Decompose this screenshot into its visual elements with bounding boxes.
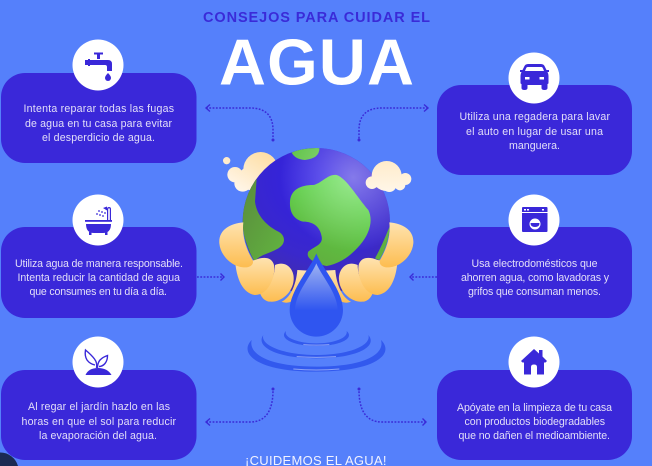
panel: uso responsable (1, 194, 196, 318)
icon: bathtub (85, 206, 112, 235)
panel: electrodomesticos: ahorren agua, como lavadoras y (461, 272, 610, 284)
panel: uso responsable: que consumes en tu día a día. (30, 286, 167, 298)
title: consejos: CONSEJOS PARA CUIDAR EL (203, 10, 430, 26)
panel: electrodomesticos: grifos que consuman menos. (468, 286, 601, 298)
icon: washing machine (522, 207, 548, 232)
panel: lavar el auto (437, 52, 632, 175)
hands (219, 222, 413, 303)
panel: regar el jardin: Al regar el jardín hazlo en las (28, 401, 170, 413)
cloud: right (366, 161, 411, 192)
arrow: bottom right (358, 388, 426, 426)
panel: reparar fugas (1, 40, 196, 163)
panel: lavar el auto: manguera. (509, 140, 560, 152)
ripples (248, 331, 385, 372)
icon: house (521, 349, 547, 374)
panel: electrodomesticos: Usa electrodomésticos que (472, 258, 598, 270)
water drop (290, 253, 343, 337)
panel: regar el jardin: la evaporación del agua. (39, 430, 157, 442)
arrow: bottom left (206, 388, 274, 426)
arrow: middle left (197, 274, 224, 280)
panel: reparar fugas: el desperdicio de agua. (42, 132, 155, 144)
title: agua: AGUA (219, 26, 414, 98)
icon: faucet (85, 52, 112, 81)
panel: uso responsable: Intenta reducir la cantidad de agua (18, 272, 180, 284)
arrow: top left (206, 104, 274, 142)
cloud: left (223, 152, 278, 192)
globe (241, 147, 397, 295)
panel: limpieza: que no dañen el medioambiente. (458, 430, 610, 442)
panel: lavar el auto: el auto en lugar de usar una (466, 126, 603, 138)
arrow: top right (358, 104, 428, 142)
corner badge (0, 452, 18, 466)
panel: uso responsable: Utiliza agua de manera responsable. (15, 258, 183, 270)
icon: car (520, 64, 549, 90)
panel: reparar fugas: de agua en tu casa para evitar (25, 118, 172, 130)
panel: lavar el auto: Utiliza una regadera para lavar (460, 111, 610, 123)
panel: reparar fugas: Intenta reparar todas las fugas (24, 103, 174, 115)
panel: limpieza: Apóyate en la limpieza de tu casa (457, 402, 612, 414)
panel: regar el jardin: horas en que el sol para reducir (22, 416, 176, 428)
arrow: middle right (410, 274, 437, 280)
panel: limpieza: con productos biodegradables (464, 416, 605, 428)
panel: regar el jardin (1, 336, 196, 460)
illustration: globe in hands with water drop (219, 147, 413, 372)
icon: plant (85, 350, 112, 375)
panel: electrodomesticos (437, 194, 632, 318)
panel: limpieza (437, 336, 632, 460)
